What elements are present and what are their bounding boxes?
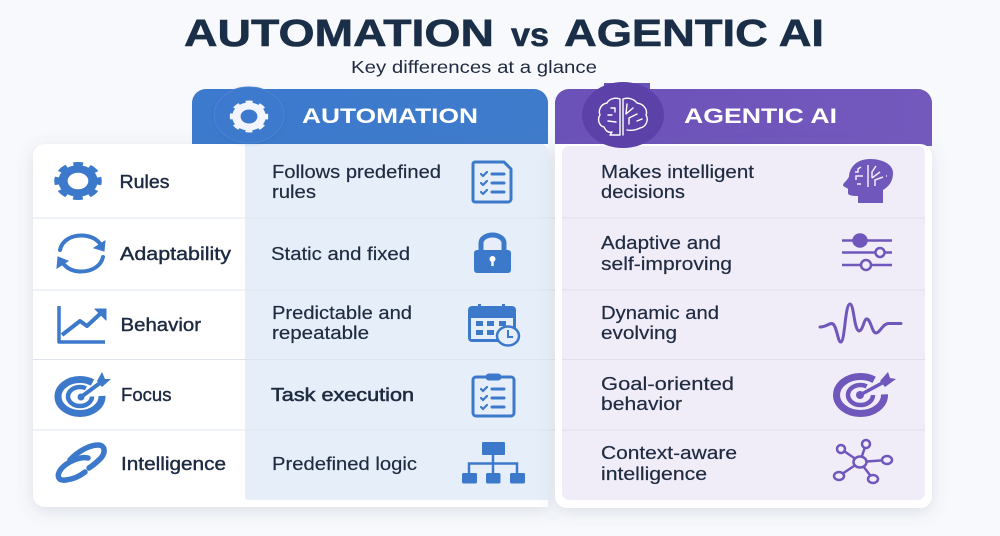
row: behavior [59,303,519,346]
automation text: behavior: Predictable and [272,303,412,323]
row: focus [58,372,514,416]
automation text: intelligence: Predefined logic [272,454,417,474]
icon: sliders [842,234,892,270]
icon: target [58,372,111,414]
icon: hierarchy [462,442,525,484]
icon: brain head [843,159,893,203]
panel: agentic ai [555,144,932,508]
row: rules [57,162,511,202]
label: focus: Focus [121,385,172,405]
row: adaptability [57,235,511,273]
automation text: focus: Task execution [271,385,414,405]
icon: calendar with clock [468,304,519,346]
automation text: rules: Follows predefined [272,162,441,182]
agentic text: decisions: Makes intelligent [601,162,754,182]
icon: gear [57,164,99,198]
agentic text: dynamic: evolving [601,323,677,343]
header: agentic ai [555,89,932,146]
label: adaptability: Adaptability [120,244,231,264]
subtitle: Key differences at a glance [351,57,597,77]
icon: purple target [836,372,896,414]
automation text: rules [272,162,441,202]
badge: brain in agentic header [582,82,664,148]
agentic text: adaptive [601,233,732,274]
agentic text: context [601,443,737,484]
label: behavior: Behavior [120,315,201,335]
icon: checklist document [473,162,511,202]
agentic text: dynamic: Dynamic and [601,303,719,323]
title: vs [511,16,549,53]
row: adaptive [601,233,892,274]
title [184,13,824,55]
agentic text: decisions: decisions [601,182,685,202]
agentic text: decisions [601,162,754,202]
icon: chain link [58,445,104,480]
icon: padlock [474,235,511,273]
header: agentic ai: AGENTIC AI [684,105,837,128]
panel: automation [33,144,555,507]
header: automation: AUTOMATION [302,105,478,128]
agentic text: adaptive: self-improving [601,254,732,274]
badge: gear in automation header [214,87,284,143]
row: decisions [601,159,893,203]
icon: sync arrows [57,236,105,272]
row: context [601,440,892,484]
label: intelligence: Intelligence [121,454,226,474]
title: AUTOMATION [184,13,494,55]
icon: network [834,440,892,483]
row: intelligence [58,442,525,484]
agentic text: goal: Goal-oriented [601,374,734,394]
automation text: behavior: repeatable [272,323,369,343]
automation text: behavior [272,303,412,343]
icon: waveform [820,304,901,342]
agentic text: goal [601,374,734,414]
automation text: rules: rules [272,182,316,202]
icon: growth chart [59,306,106,342]
agentic text: context: Context-aware [601,443,737,463]
agentic text: context: intelligence [601,464,707,484]
icon: clipboard [473,374,514,416]
agentic text: dynamic [601,303,719,343]
row: dynamic [601,303,901,343]
automation text: adaptability: Static and fixed [271,244,410,264]
row: goal [601,372,896,414]
title: AGENTIC AI [564,13,824,55]
agentic text: adaptive: Adaptive and [601,233,721,253]
agentic text: goal: behavior [601,394,682,414]
header: automation [192,89,548,146]
label: rules: Rules [120,172,170,192]
